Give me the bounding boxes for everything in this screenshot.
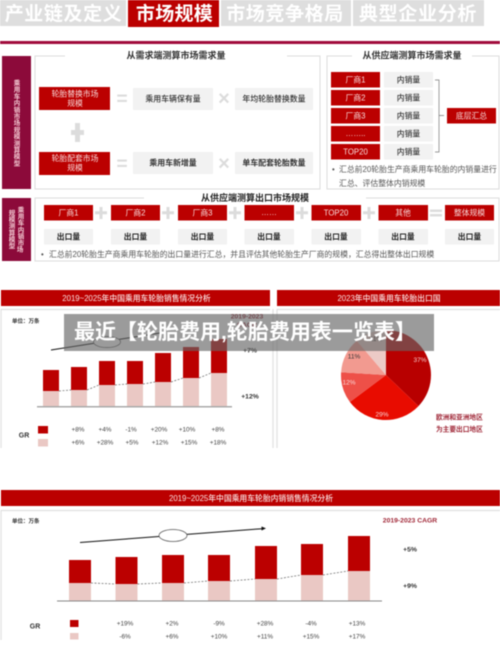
pie chart: 12% — [342, 380, 356, 386]
panel: demand side: × — [218, 88, 230, 110]
growth rate table: sales: +12% — [152, 440, 169, 446]
CAGR labels: sales: +7% — [243, 348, 257, 354]
sidebar: domestic market model: 销 — [14, 105, 21, 114]
sidebar: domestic market model: 乘 — [14, 78, 21, 87]
sidebar: domestic market model: 模 — [14, 152, 21, 161]
sidebar: export market model: 市 — [18, 238, 25, 247]
pie chart: 11% — [370, 336, 382, 343]
panel: demand side: 年均轮胎替换数量 — [242, 94, 306, 104]
panel: demand side: = — [116, 154, 128, 175]
bar chart: domestic sales — [57, 536, 382, 602]
CAGR labels: domestic sales: 2019-2023 CAGR — [383, 518, 437, 524]
navigation tabs: 产业链及定义 — [5, 2, 122, 25]
sidebar: domestic market model: 场 — [14, 118, 21, 127]
panel: supply side domestic: 内销量 — [397, 92, 420, 102]
CAGR labels: sales: +12% — [241, 394, 259, 400]
growth rate table: sales: +10% — [179, 426, 196, 434]
sidebar: export market model — [2, 198, 31, 261]
growth rate table: sales: GR — [19, 432, 29, 440]
panel: supply side domestic: 厂商3 — [346, 110, 365, 120]
sidebar: domestic market model — [2, 56, 31, 189]
sidebar: domestic market model: 规 — [14, 125, 21, 134]
pie chart: 37% — [413, 357, 427, 364]
chart panel: sales analysis — [1, 290, 273, 448]
panel: supply side domestic: 内销量 — [397, 128, 420, 138]
panel: export market: 汇总前20轮胎生产商乘用车轮胎的出口量进行汇总，并且评估其他轮胎生产厂商的规模，汇总得出整体出口规模 — [49, 249, 434, 259]
panel: export market: • — [41, 250, 44, 259]
chart panel: domestic sales — [1, 490, 500, 640]
sidebar: domestic market model: 内 — [14, 98, 20, 107]
panel: supply side domestic: TOP20 — [343, 148, 368, 156]
sidebar: domestic market model: 用 — [14, 86, 20, 94]
panel: export market: 出口量 — [57, 232, 80, 242]
panel: demand side — [35, 50, 320, 189]
chart panel: domestic sales: 单位：万条 — [12, 517, 40, 525]
panel: export market: 厂商3 — [193, 208, 212, 218]
panel: export market: 整体规模 — [454, 208, 485, 218]
pie chart: 29% — [375, 412, 389, 418]
panel: demand side: 规模 — [67, 98, 83, 108]
growth rate table: sales: +15% — [181, 440, 198, 446]
panel: export market: 其他 — [395, 208, 411, 218]
growth rate table: domestic sales: +11% — [257, 634, 273, 640]
growth rate table: sales: +4% — [99, 426, 112, 434]
growth rate table: domestic sales: +17% — [349, 634, 366, 640]
panel: supply side domestic: 内销量 — [397, 74, 420, 84]
panel: export market — [35, 192, 499, 261]
CAGR labels: domestic sales — [383, 518, 437, 590]
growth rate table: sales: +8% — [212, 426, 225, 434]
growth rate table: domestic sales: +15% — [303, 634, 320, 640]
CAGR labels: domestic sales: +5% — [403, 546, 417, 554]
growth rate table: domestic sales: GR — [30, 624, 40, 630]
panel: demand side: 单车配套轮胎数量 — [242, 158, 306, 168]
sidebar: export market model: 测 — [9, 221, 16, 230]
sidebar: export market model: 场 — [17, 245, 24, 254]
CAGR labels: sales — [231, 314, 263, 400]
sidebar: domestic market model: 算 — [14, 145, 21, 154]
panel: supply side domestic: 汇总前20轮胎生产商乘用车轮胎的内销量进行 — [339, 164, 497, 174]
panel: supply side domestic: 厂商2 — [346, 92, 365, 102]
chart panel: domestic sales: 2019~2025年中国乘用车轮胎内销销售情况分析 — [169, 493, 333, 503]
growth rate table: sales: +18% — [210, 440, 227, 446]
callout: export regions: 为主要出口地区 — [436, 424, 483, 434]
growth rate table: domestic sales: +13% — [349, 620, 366, 628]
sidebar: domestic market model: 车 — [14, 91, 21, 100]
panel: demand side: 乘用车新增量 — [149, 158, 197, 168]
navigation tabs — [0, 0, 484, 27]
panel: supply side domestic — [327, 50, 499, 189]
title overlay banner — [64, 314, 434, 351]
panel: supply side domestic: 内销量 — [397, 110, 420, 120]
navigation tabs: 市场规模 — [136, 2, 213, 25]
chart panel: export countries: 2023年中国乘用车轮胎出口国 — [337, 293, 441, 303]
chart panel: export countries — [277, 290, 500, 448]
sidebar: export market model: 型 — [9, 241, 16, 250]
panel: supply side domestic: …….. — [346, 129, 365, 138]
growth rate table: domestic sales — [30, 620, 366, 640]
growth rate table: sales: +28% — [97, 440, 114, 446]
sidebar: export market model: 规 — [9, 208, 16, 217]
callout: export regions: 欧洲和亚洲地区 — [436, 412, 483, 422]
growth rate table: domestic sales: +6% — [166, 634, 179, 640]
sidebar: domestic market model: 测 — [14, 138, 21, 147]
panel: demand side: = — [116, 89, 128, 110]
growth rate table: sales: +5% — [126, 440, 139, 446]
sidebar: export market model: 用 — [18, 213, 24, 221]
heading: supply side: 从供应端测算市场需求量 — [362, 50, 462, 60]
panel: export market: 厂商1 — [59, 208, 78, 218]
panel: export market: 出口量 — [458, 232, 481, 242]
sidebar: domestic market model: 型 — [14, 158, 21, 167]
panel: demand side: × — [218, 153, 230, 175]
panel: export market: 厂商2 — [126, 208, 145, 218]
trend arrow: sales — [51, 333, 160, 350]
growth rate table: sales: +20% — [151, 426, 168, 434]
panel: supply side domestic: • — [332, 165, 335, 174]
panel: supply side domestic: 内销量 — [397, 146, 420, 156]
chart panel: sales analysis: 2019~2025年中国乘用车轮胎销售情况分析 — [62, 293, 211, 303]
growth rate table: sales: +6% — [72, 440, 85, 446]
panel: export market: 出口量 — [257, 232, 281, 242]
CAGR labels: sales: 2019-2023 — [231, 314, 263, 320]
CAGR labels: sales: CAGR — [237, 322, 257, 329]
growth rate table: domestic sales: +19% — [117, 620, 134, 628]
panel: export market: 出口量 — [324, 232, 348, 242]
sidebar: export market model: 算 — [9, 228, 16, 237]
sidebar: domestic market model: 模 — [14, 132, 21, 141]
trend arrow: domestic sales — [80, 526, 266, 542]
growth rate table: sales: -1% — [125, 426, 137, 434]
pie chart — [341, 330, 431, 420]
sidebar: export market model: 乘 — [18, 205, 25, 214]
sidebar: domestic market model: 市 — [14, 112, 21, 120]
panel: demand side: 轮胎配套市场 — [52, 153, 99, 163]
growth rate table: domestic sales: -4% — [305, 620, 317, 628]
panel: demand side: 规模 — [67, 162, 83, 172]
chart panel: sales analysis: 单位：万条 — [12, 317, 40, 325]
panel: export market: TOP20 — [324, 208, 349, 218]
heading: export market: 从供应端测算出口市场规模 — [201, 192, 309, 203]
sidebar: export market model: 销 — [18, 231, 25, 240]
navigation tabs: 典型企业分析 — [359, 2, 477, 25]
panel: supply side domestic: 厂商1 — [346, 74, 365, 84]
growth rate table: domestic sales: +10% — [211, 634, 228, 640]
panel: export market: …… — [261, 208, 277, 217]
pie chart: 11% — [348, 354, 360, 360]
CAGR labels: domestic sales: +9% — [403, 583, 417, 590]
growth rate table: domestic sales: +2% — [166, 620, 179, 628]
growth rate table: sales: +8% — [72, 426, 85, 434]
sidebar: export market model: 模 — [9, 215, 16, 224]
bar chart: sales — [37, 339, 232, 408]
sidebar: export market model: 内 — [18, 225, 24, 234]
navigation tabs: 市场竞争格局 — [226, 2, 344, 25]
panel: export market: 出口量 — [124, 232, 147, 242]
growth rate table: sales — [19, 426, 227, 446]
panel: supply side domestic: 汇总、评估整体内销规模 — [339, 178, 425, 188]
heading: demand side: 从需求端测算市场需求量 — [126, 50, 226, 60]
growth rate table: domestic sales: -6% — [119, 634, 131, 640]
top divider line — [0, 41, 500, 44]
title overlay banner: 最近【轮胎费用,轮胎费用表一览表】 — [74, 321, 416, 344]
panel: demand side: 轮胎替换市场 — [52, 88, 99, 98]
growth rate table: domestic sales: -9% — [213, 620, 225, 628]
panel: supply side domestic: 底层汇总 — [456, 110, 487, 120]
growth rate table: domestic sales: +28% — [257, 620, 274, 628]
panel: export market: 出口量 — [391, 232, 415, 242]
panel: export market: 出口量 — [191, 232, 214, 242]
callout: export regions — [436, 412, 483, 434]
sidebar: export market model: 车 — [18, 218, 25, 227]
sidebar: export market model: 模 — [9, 234, 16, 243]
panel: demand side: 乘用车辆保有量 — [145, 94, 201, 104]
